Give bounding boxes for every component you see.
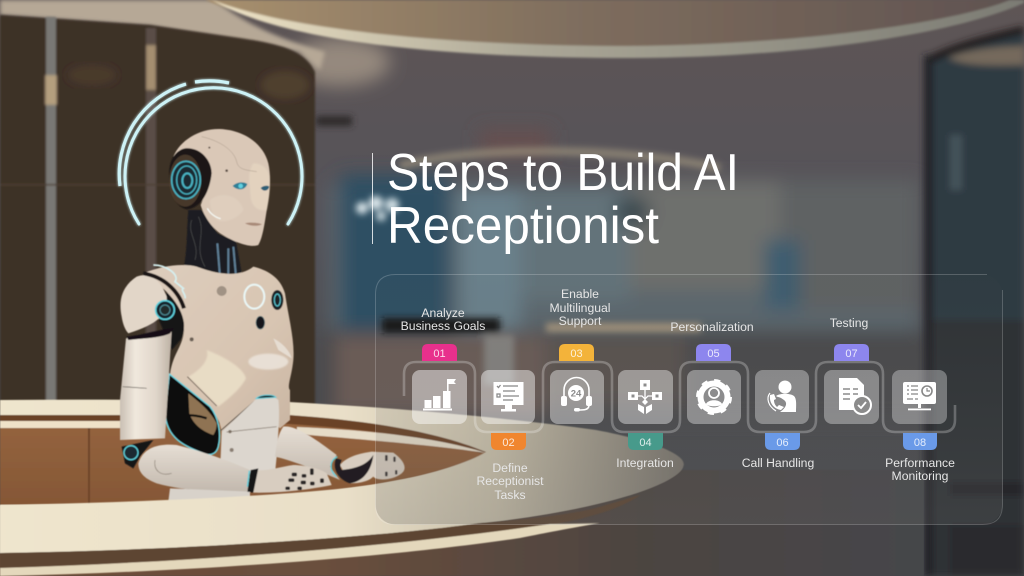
decorative blurred details <box>316 116 720 385</box>
step 08: performance monitoring: 08 <box>914 437 926 449</box>
step 04: integration <box>616 370 674 470</box>
step 03: enable multilingual support: 03 <box>570 348 583 360</box>
step 08: performance monitoring <box>885 370 955 483</box>
step 06: call handling <box>742 370 814 470</box>
step 05: personalization: 05 <box>707 348 720 360</box>
step 01: analyze business goals: Business Goals <box>401 319 485 333</box>
step 01: analyze business goals: Analyze <box>421 306 465 320</box>
meander connector line <box>404 362 955 432</box>
step 01: analyze business goals: 01 <box>433 348 446 360</box>
step 06: call handling: Call Handling <box>742 456 814 470</box>
robot receptionist <box>120 129 405 502</box>
step 08: performance monitoring: Monitoring <box>892 469 948 483</box>
step 07: testing: 07 <box>845 348 858 360</box>
robot head and neck <box>169 129 270 282</box>
title: Steps to Build AI <box>387 144 739 202</box>
step 08: performance monitoring: Performance <box>885 456 955 470</box>
decorative right glass door <box>924 30 1024 576</box>
step 04: integration: 04 <box>639 437 652 449</box>
decorative tan ceiling soffit <box>0 0 325 70</box>
step 04: integration: Integration <box>616 456 674 470</box>
step 02: define receptionist tasks: Receptionist <box>476 474 544 488</box>
decorative wooden wall left <box>0 15 315 410</box>
step 05: personalization: Personalization <box>670 320 754 334</box>
step 02: define receptionist tasks <box>476 370 544 502</box>
step 06: call handling: 06 <box>776 437 789 449</box>
robot body and arms <box>120 265 405 502</box>
step 02: define receptionist tasks: 02 <box>502 437 515 449</box>
step 03: enable multilingual support: Enable <box>561 287 599 301</box>
halo: glowing arcs above robot <box>119 81 302 224</box>
panel: steps process <box>376 274 1002 524</box>
title <box>372 144 739 255</box>
decorative ceiling <box>205 0 1024 58</box>
step 01: analyze business goals <box>401 306 485 424</box>
reception desk: back rim and well <box>0 400 924 576</box>
step 07: testing <box>824 316 879 424</box>
step 03: enable multilingual support: Support <box>559 314 602 328</box>
step 05: personalization <box>670 320 754 424</box>
step 02: define receptionist tasks: Define <box>492 461 528 475</box>
step 03: enable multilingual support <box>550 287 610 424</box>
desk front rim in front of robot <box>0 455 683 576</box>
step 07: testing: Testing <box>830 316 868 330</box>
step 02: define receptionist tasks: Tasks <box>494 488 526 502</box>
title: Receptionist <box>387 197 660 255</box>
step 03: enable multilingual support: 24 <box>571 388 582 400</box>
step 03: enable multilingual support: Multilingual <box>550 301 610 315</box>
